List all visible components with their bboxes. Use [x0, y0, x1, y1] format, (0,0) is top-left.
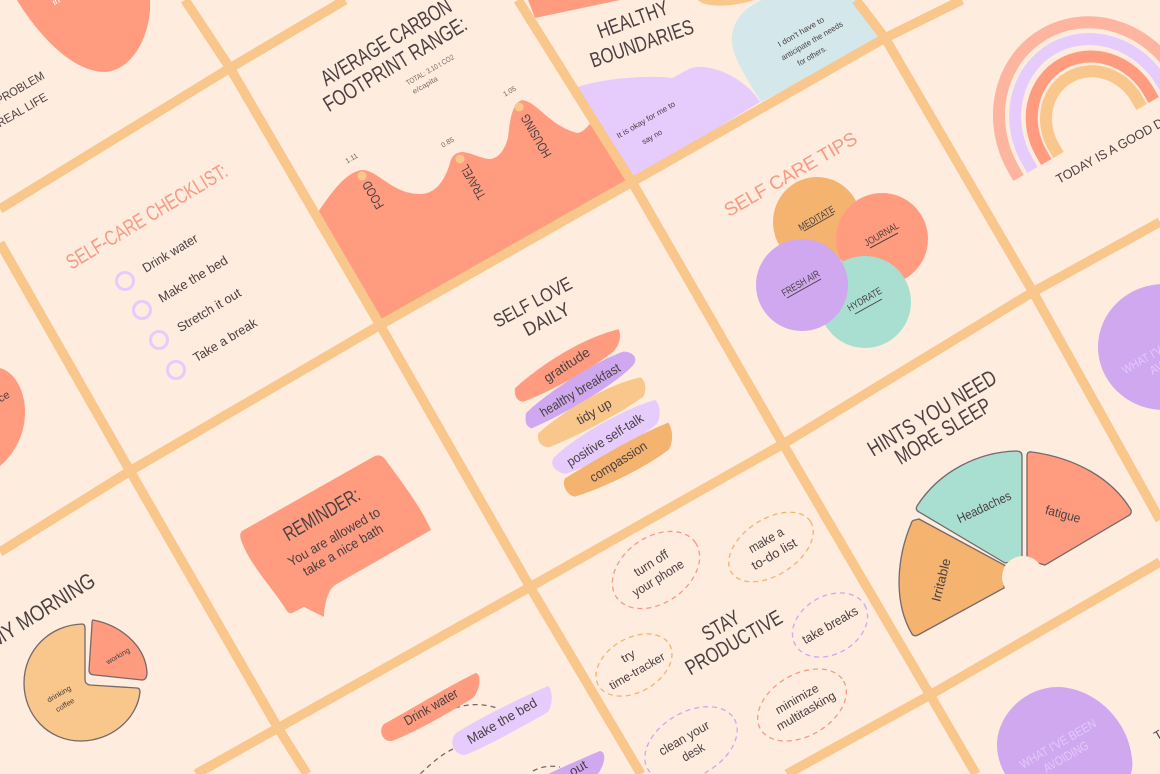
text: total [404, 53, 456, 96]
stack bar: gratitude [515, 329, 620, 402]
circle: hydrate: HYDRATE [846, 286, 884, 314]
list: checkboxes [116, 272, 184, 378]
text: boundary 1: It is okay for me to [615, 99, 677, 140]
bubble: turn off your phone [598, 515, 714, 625]
bubble: minimize multitasking [745, 654, 859, 756]
text: total: e/capita [411, 74, 440, 96]
chart: headaches slice: Headaches [955, 488, 1014, 526]
panel: my morning [0, 568, 147, 741]
stack bar: positive self-talk: positive self-talk [564, 410, 646, 470]
text: boundary 1: say no [640, 127, 664, 146]
chart: fatigue slice: fatigue [1044, 502, 1082, 526]
blob: red shape [17, 0, 150, 72]
chart: working slice [89, 620, 147, 680]
blob: top red fragment [528, 0, 620, 18]
panel: stay productive [585, 498, 879, 774]
heading: REMINDER: [280, 484, 364, 546]
stack bar: tidy up [538, 377, 645, 447]
circle: journal [836, 193, 928, 285]
chart: category labels: FOOD [359, 178, 387, 212]
panel: self love daily [490, 274, 672, 497]
text: what i've been avoiding: WHAT I'VE BEEN [1017, 716, 1099, 772]
panel: average carbon footprint [316, 0, 632, 325]
bubble: turn off your phone: your phone [629, 556, 687, 600]
heading: PRODUCTIVE [681, 606, 787, 680]
chart: values: 1.11 [345, 153, 360, 165]
panel: self-care checklist [62, 160, 260, 378]
bubble: try time-tracker: try [618, 646, 638, 666]
circle: hydrate [819, 256, 911, 348]
heading: MORE SLEEP [890, 392, 996, 470]
icon: rainbow [963, 0, 1160, 178]
panel: what I've been avoiding, right [1098, 284, 1160, 410]
bubble: clean your desk [632, 691, 750, 774]
stack bar: gratitude: gratitude [541, 345, 593, 385]
chart: category labels [359, 111, 554, 212]
step: make the bed: Make the bed [464, 695, 540, 747]
heading: DAILY [520, 299, 574, 341]
panel: bottom routine path [381, 673, 604, 774]
panel: what I've been avoiding, bottom [997, 687, 1160, 774]
blob: lavender [575, 67, 760, 180]
stack bar: tidy up: tidy up [574, 396, 614, 428]
bubble: try time-tracker: time-tracker [607, 649, 667, 693]
chart: centre hub [1002, 556, 1044, 598]
bubble: take breaks [781, 580, 879, 670]
blob: blue [732, 0, 880, 102]
panel: self care tips [721, 128, 928, 348]
list: items: Make the bed [156, 252, 230, 306]
step: drink water [381, 673, 480, 741]
blob: top orange fragment [698, 0, 754, 6]
chart: irritable slice [899, 519, 1006, 636]
circle: meditate [773, 177, 861, 267]
chart: fatigue slice [1027, 452, 1131, 565]
chart: values: 0.85 [440, 137, 456, 149]
chart: category labels: TRAVEL [457, 162, 489, 202]
bubble: make a to-do list: to-do list [749, 535, 800, 573]
list: items: Stretch it out [174, 285, 244, 335]
speech bubble [240, 455, 431, 617]
text: boundary 2: for others. [796, 44, 828, 68]
text: problem in real life [0, 68, 50, 130]
chart: data point dots [358, 102, 524, 180]
heading: SELF CARE TIPS [721, 128, 861, 222]
heading: SELF LOVE [490, 274, 576, 332]
bubble: turn off your phone: turn off [631, 546, 671, 579]
circle: meditate: MEDITATE [797, 204, 837, 234]
heading [681, 606, 787, 680]
blob: purple [997, 687, 1132, 774]
chart: category labels: HOUSING [518, 111, 554, 161]
chart: values [345, 86, 518, 165]
chart: values: 1.05 [502, 86, 518, 98]
connector: dashed curve [420, 705, 560, 774]
list: items [140, 230, 260, 365]
panel: rainbow [963, 0, 1160, 187]
heading: BOUNDARIES [587, 16, 697, 72]
text: boundary 2: I don't have to [776, 15, 826, 49]
heading [490, 274, 576, 341]
list: items: Take a break [190, 315, 260, 365]
chart: irritable slice: Irritable [928, 557, 954, 603]
panel: reminder [240, 455, 431, 617]
text: message: take a nice bath [300, 521, 386, 579]
chart: headaches slice [916, 451, 1022, 563]
panel: healthy boundaries [528, 0, 880, 180]
step: drink water: Drink water [401, 685, 461, 728]
bubble: clean your desk: desk [679, 739, 708, 764]
circle: fresh air [756, 239, 848, 331]
blob: red circle [0, 368, 25, 466]
step: purple bar [548, 751, 604, 774]
text: message: You are allowed to [285, 505, 383, 569]
blob: purple [1098, 284, 1160, 410]
chart: drinking coffee slice [24, 624, 140, 741]
heading [863, 365, 1001, 470]
stack bar: healthy breakfast: healthy breakfast [537, 360, 623, 420]
circle: journal: JOURNAL [863, 221, 902, 249]
chart: drinking coffee slice: drinking [45, 684, 73, 704]
bubble: minimize multitasking: multitasking [774, 688, 838, 734]
list: items: Drink water [140, 230, 201, 275]
stack bar: compassion: compassion [587, 438, 650, 485]
bubble: make a to-do list: make a [746, 524, 787, 556]
circle: fresh air: FRESH AIR [780, 269, 822, 299]
bubble: minimize multitasking: minimize [773, 681, 822, 717]
bubble: try time-tracker [585, 621, 683, 709]
panel: problem in real life [0, 0, 150, 130]
stack bar: compassion [564, 423, 672, 497]
text: boundary 2: anticipate the needs [779, 20, 845, 62]
bubble: clean your desk: clean your [656, 717, 713, 758]
stack bars: daily habits [515, 329, 672, 497]
step: make the bed [452, 686, 552, 755]
bubble: take breaks: take breaks [799, 603, 861, 647]
panel: hints you need more sleep [863, 365, 1131, 636]
chart: area chart [318, 100, 632, 325]
panel: left partial blob [0, 368, 25, 466]
heading: SELF-CARE CHECKLIST: [62, 160, 232, 274]
heading: STAY [698, 606, 744, 646]
chart: working slice: working [104, 646, 131, 667]
bubble: make a to-do list [716, 498, 826, 596]
heading: HINTS YOU NEED [863, 365, 1001, 461]
text: total: TOTAL: 3.10 t CO2 [404, 53, 456, 87]
chart: drinking coffee slice: coffee [54, 696, 76, 714]
